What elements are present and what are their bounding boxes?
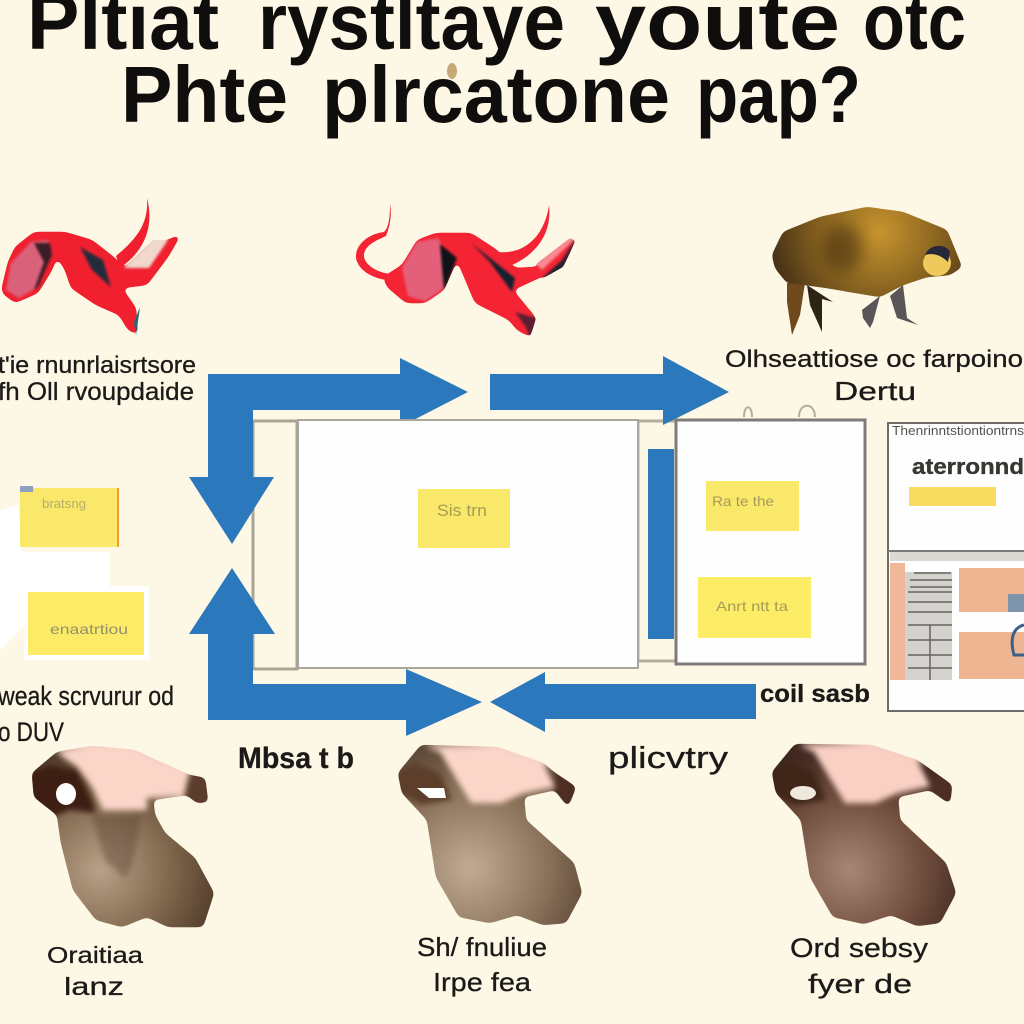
text: lower right caption: coil sasb <box>760 680 870 708</box>
panel: right screenshot: Thenrinntstiontiontrns <box>892 423 1024 438</box>
title: pap? <box>696 50 861 139</box>
text: lower left caption: o DUV <box>0 717 64 747</box>
text: label right: plicvtry <box>608 740 729 775</box>
text: organ caption left: t'ie rnunrlaisrtsore <box>0 352 196 379</box>
title <box>27 0 966 139</box>
icon: bison animal <box>772 207 962 335</box>
arrow: bottom right <box>490 672 756 732</box>
icon: paper hooks <box>744 406 815 417</box>
text: caption tissue centre: Irpe fea <box>433 967 532 997</box>
text: animal caption: Dertu <box>834 376 916 406</box>
text: organ caption left <box>0 352 196 406</box>
text: animal caption: Olhseattiose oc farpoino <box>725 346 1023 373</box>
text: animal caption <box>725 346 1023 406</box>
bar: vertical blue <box>648 449 674 639</box>
note: left top: bratsng <box>42 496 86 511</box>
note: left bottom <box>28 592 144 655</box>
icon: title speck <box>447 63 457 79</box>
panel: right screenshot <box>888 423 1024 711</box>
text: caption tissue right: Ord sebsy <box>790 933 929 963</box>
text: caption tissue left: lanz <box>64 973 124 1001</box>
text: organ caption left: fh Oll rvoupdaide <box>0 378 194 406</box>
note: centre: Sis trn <box>437 501 487 520</box>
panel: right screenshot: aterronnd <box>912 454 1024 479</box>
panel: centre box <box>298 420 638 668</box>
panel: right box <box>676 420 865 664</box>
note: right top: Ra te the <box>712 493 774 509</box>
text: caption tissue left: Oraitiaa <box>47 942 143 968</box>
arrow: top right <box>490 356 729 425</box>
icon: tissue centre <box>398 745 582 925</box>
panel: white left backing <box>0 486 149 660</box>
title: plrcatone <box>322 50 670 139</box>
icon: red organ left <box>2 198 182 335</box>
text: caption tissue centre <box>417 932 547 997</box>
arrow: bottom left loop <box>189 568 482 736</box>
icon: red organ centre <box>356 204 578 337</box>
title: Phte <box>121 50 288 139</box>
text: caption tissue right <box>790 933 929 999</box>
arrow: top left loop <box>189 358 468 544</box>
note: right top <box>706 481 799 531</box>
text: lower left caption <box>0 681 174 747</box>
note: left bottom: enaatrtiou <box>50 621 128 637</box>
text: caption tissue right: fyer de <box>808 969 912 999</box>
note: right bottom: Anrt ntt ta <box>716 598 788 614</box>
note: centre <box>418 489 510 548</box>
text: caption tissue centre: Sh/ fnuliue <box>417 932 547 962</box>
note: right bottom <box>698 577 811 638</box>
text: lower left caption: weak scrvurur od <box>0 681 174 711</box>
panel: faint connector frame <box>253 421 676 669</box>
text: caption tissue left <box>47 942 143 1001</box>
text: label left: Mbsa t b <box>238 742 354 775</box>
note: left top <box>20 486 119 547</box>
icon: tissue left <box>32 746 214 927</box>
icon: tissue right <box>772 744 956 926</box>
